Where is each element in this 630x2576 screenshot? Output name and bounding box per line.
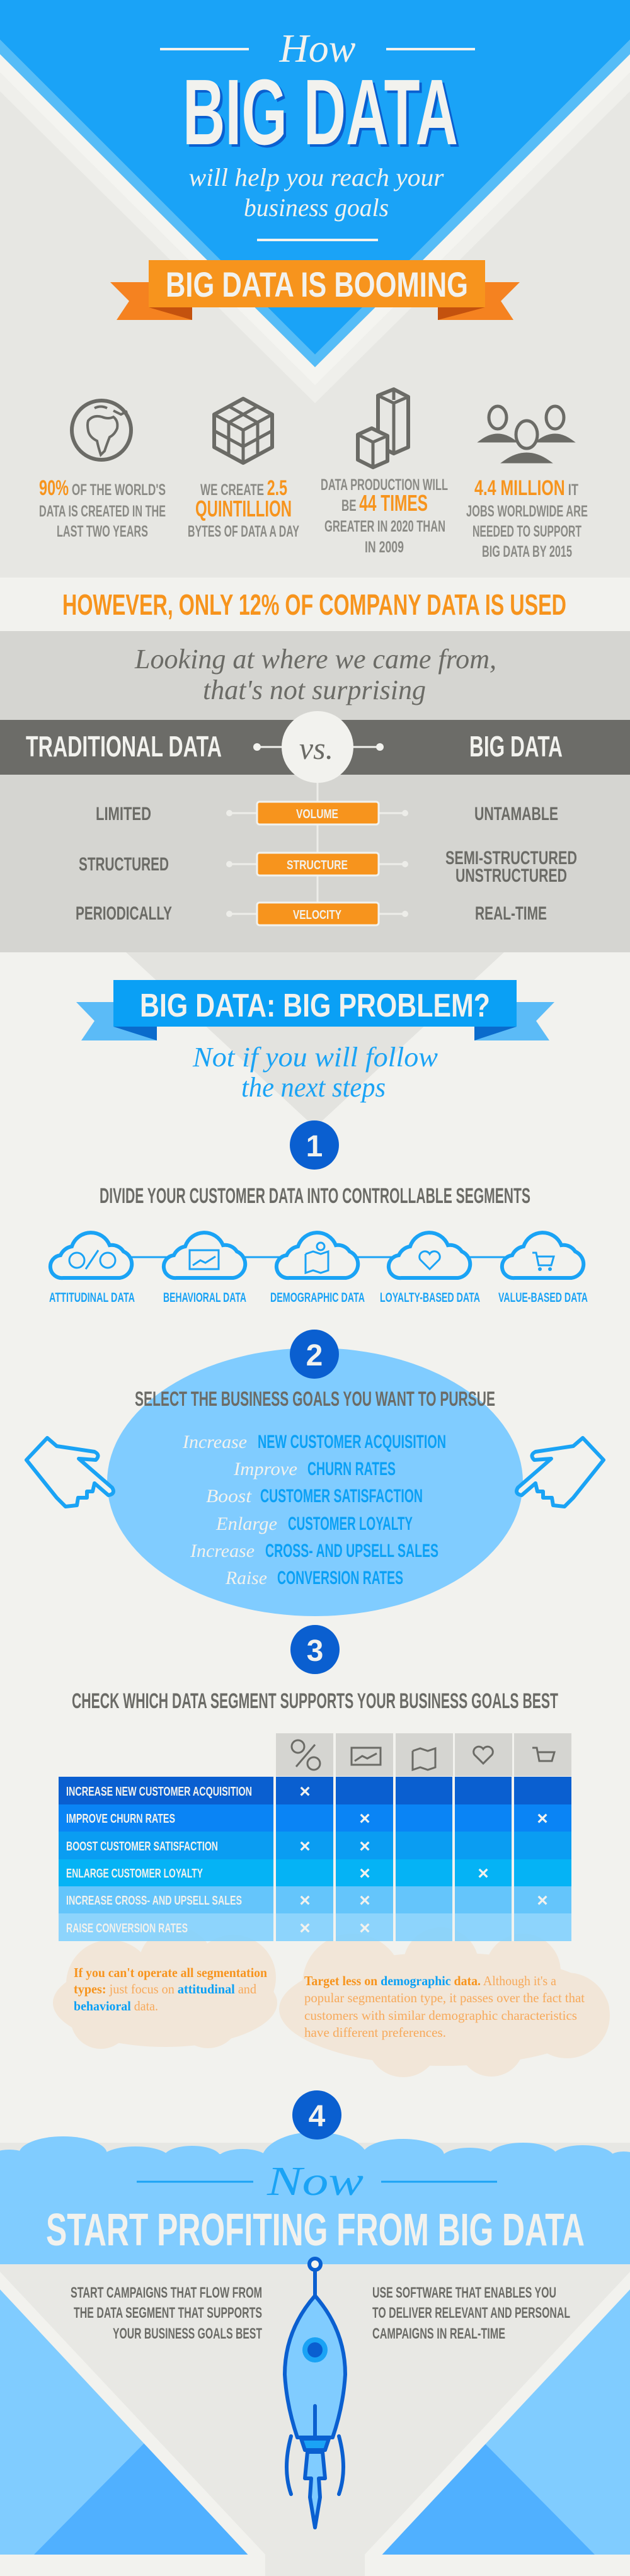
stat: 44 times: BE 44 TIMES [341, 490, 428, 516]
goals list: CROSS- AND UPSELL SALES [265, 1541, 438, 1561]
stat: 44 times: DATA PRODUCTION WILL [321, 476, 448, 494]
step 4 cloud band [0, 2132, 630, 2265]
data segment table: BOOST CUSTOMER SATISFACTION [66, 1840, 218, 1854]
title: BIG DATA [183, 60, 461, 167]
data segment table: × [299, 1781, 311, 1802]
bottom triangles background [0, 2264, 630, 2576]
script: looking at where we came from [134, 644, 496, 705]
step 1 badge [290, 1120, 339, 1170]
data segment table: × [359, 1836, 370, 1857]
data segment table: × [359, 1863, 370, 1884]
script: Now: Now [266, 2158, 364, 2204]
comparison rows: SEMI-STRUCTURED [445, 848, 577, 869]
cloud: value [502, 1233, 583, 1278]
goals ellipse [107, 1348, 523, 1616]
data segment table: × [359, 1918, 370, 1939]
comparison rows: UNTAMABLE [474, 804, 558, 824]
data segment table: RAISE CONVERSION RATES [66, 1922, 188, 1935]
comparison rows: PERIODICALLY [76, 903, 172, 924]
goals list: Raise [225, 1568, 267, 1588]
tip: right text: have different preferences. [304, 2025, 446, 2040]
goals list [182, 1432, 446, 1588]
stat: 90% [39, 476, 166, 540]
script: not if you will follow: the next steps [241, 1072, 386, 1103]
comparison rows: REAL-TIME [475, 903, 547, 924]
icon: right pointing hand [517, 1438, 604, 1507]
comparison rows: VELOCITY [293, 908, 342, 922]
text: start campaigns: START CAMPAIGNS THAT FLOW FROM [71, 2284, 262, 2301]
comparison rows: STRUCTURE [287, 858, 348, 872]
goals list: Improve [233, 1459, 297, 1479]
segment clouds: DEMOGRAPHIC DATA [270, 1291, 365, 1305]
comparison rows [76, 802, 577, 925]
vs circle [282, 711, 353, 916]
data segment table [59, 1733, 571, 1941]
tip: left text: behavioral data. [74, 1998, 158, 2014]
stat: 4.4 million: 4.4 MILLION IT [474, 476, 578, 500]
tip: right text: popular segmentation type, it passes over the fact that [304, 1990, 585, 2005]
tip clouds [53, 1927, 610, 2077]
icon: rocket [285, 2259, 345, 2528]
stat: 2.5 quintillion [188, 476, 299, 540]
title: How: How [279, 26, 356, 71]
script: looking at where we came from: that's not surprising [203, 675, 426, 705]
goals list: NEW CUSTOMER ACQUISITION [258, 1432, 446, 1452]
text: start campaigns: THE DATA SEGMENT THAT SUPPORTS [74, 2305, 262, 2322]
stat: 44 times [321, 476, 448, 556]
comparison rows: UNSTRUCTURED [455, 865, 567, 886]
subtitle: will help you reach your [189, 163, 444, 191]
icon: left pointing hand [26, 1438, 113, 1507]
text: start campaigns: YOUR BUSINESS GOALS BEST [113, 2325, 262, 2342]
segment clouds: BEHAVIORAL DATA [163, 1291, 246, 1305]
step 2 badge: 2 [306, 1339, 323, 1372]
comparison header band [0, 720, 630, 775]
stat: 90%: 90% OF THE WORLD'S [39, 476, 166, 500]
data segment table: ENLARGE CUSTOMER LOYALTY [66, 1867, 203, 1881]
segment clouds: ATTITUDINAL DATA [49, 1291, 135, 1305]
segment clouds [49, 1233, 588, 1305]
stat: 4.4 million: BIG DATA BY 2015 [482, 543, 572, 561]
stat: 90%: LAST TWO YEARS [57, 523, 148, 540]
comparison rows: LIMITED [96, 804, 151, 824]
data segment table: × [359, 1808, 370, 1829]
subtitle [189, 163, 444, 240]
data segment table: INCREASE NEW CUSTOMER ACQUISITION [66, 1785, 252, 1799]
step 2 badge [290, 1330, 339, 1379]
text: use software [372, 2284, 570, 2342]
cloud: attitudinal [50, 1233, 132, 1278]
tip: left text [74, 1965, 267, 2014]
tip: right cloud [279, 1927, 610, 2077]
goals list: CUSTOMER SATISFACTION [260, 1486, 423, 1507]
tip: right text [304, 1973, 585, 2040]
vs circle: vs. [299, 731, 333, 766]
stat: 44 times: IN 2009 [365, 539, 404, 556]
stat: 2.5 quintillion: BYTES OF DATA A DAY [188, 523, 299, 540]
stat: 4.4 million [466, 476, 588, 561]
goals list: Increase [190, 1541, 255, 1561]
subtitle: business goals [244, 193, 389, 222]
step 1 badge: 1 [306, 1130, 323, 1163]
stat: 2.5 quintillion: QUINTILLION [195, 496, 292, 521]
text: use software: CAMPAIGNS IN REAL-TIME [372, 2325, 505, 2342]
icon: bar chart [358, 389, 408, 467]
title: BIG DATA: BIG DATA [185, 63, 461, 167]
comparison header band: BIG DATA [469, 730, 563, 763]
cloud: demographic [277, 1233, 358, 1278]
goals list: Boost [206, 1486, 252, 1507]
data segment table: × [537, 1890, 548, 1911]
ribbon: BIG DATA IS BOOMING: BIG DATA IS BOOMING [166, 265, 468, 304]
script: looking at where we came from: Looking at where we came from, [134, 644, 496, 675]
icon: globe [72, 401, 131, 460]
tip: left text: If you can't operate all segmentation [74, 1965, 267, 1980]
goals list: Increase [182, 1432, 247, 1452]
data segment table: × [537, 1808, 548, 1829]
stat: 90%: DATA IS CREATED IN THE [39, 503, 166, 520]
data segment table: × [299, 1890, 311, 1911]
stat: 2.5 quintillion: WE CREATE 2.5 [200, 476, 287, 500]
goals list: Enlarge [215, 1513, 277, 1534]
segment clouds: VALUE-BASED DATA [498, 1291, 588, 1305]
segment clouds: LOYALTY-BASED DATA [380, 1291, 480, 1305]
data segment table: × [359, 1890, 370, 1911]
tip: left cloud [53, 1927, 277, 2049]
comparison rows: VOLUME [296, 807, 338, 821]
data segment table: × [478, 1863, 489, 1884]
data segment table: × [299, 1918, 311, 1939]
comparison rows: STRUCTURED [79, 854, 169, 875]
goals list: CUSTOMER LOYALTY [288, 1513, 413, 1534]
goals list: CHURN RATES [307, 1459, 396, 1479]
icon: people [482, 406, 571, 462]
step 3 badge: 3 [307, 1634, 323, 1668]
cloud: behavioral [164, 1233, 245, 1278]
text: start campaigns [71, 2284, 262, 2342]
data segment table: × [299, 1836, 311, 1857]
ribbon: BIG DATA IS BOOMING [110, 260, 520, 320]
tip: right text: customers with similar demographic characteristics [304, 2008, 577, 2023]
script: not if you will follow [192, 1042, 438, 1103]
ribbon: BIG DATA: BIG PROBLEM? [76, 980, 554, 1040]
step 4 badge [292, 2090, 341, 2140]
goals list: CONVERSION RATES [277, 1568, 403, 1588]
title: BIG DATA: BIG DATA [183, 60, 458, 164]
tip: left text: types: just focus on attitudinal and [74, 1981, 256, 1997]
script: not if you will follow: Not if you will follow [192, 1042, 438, 1073]
step 4 badge: 4 [309, 2100, 326, 2133]
icon: cube stack [214, 399, 272, 463]
step 3 badge [290, 1625, 340, 1674]
tip: right text: Target less on demographic data. Although it's a [304, 1973, 557, 1988]
cloud: loyalty [389, 1233, 470, 1278]
data segment table: IMPROVE CHURN RATES [66, 1812, 175, 1826]
comparison header band: TRADITIONAL DATA [26, 730, 222, 763]
ribbon: BIG DATA: BIG PROBLEM?: BIG DATA: BIG PROBLEM? [140, 988, 490, 1024]
stat: 44 times: GREATER IN 2020 THAN [324, 518, 445, 535]
data segment table: INCREASE CROSS- AND UPSELL SALES [66, 1894, 242, 1908]
